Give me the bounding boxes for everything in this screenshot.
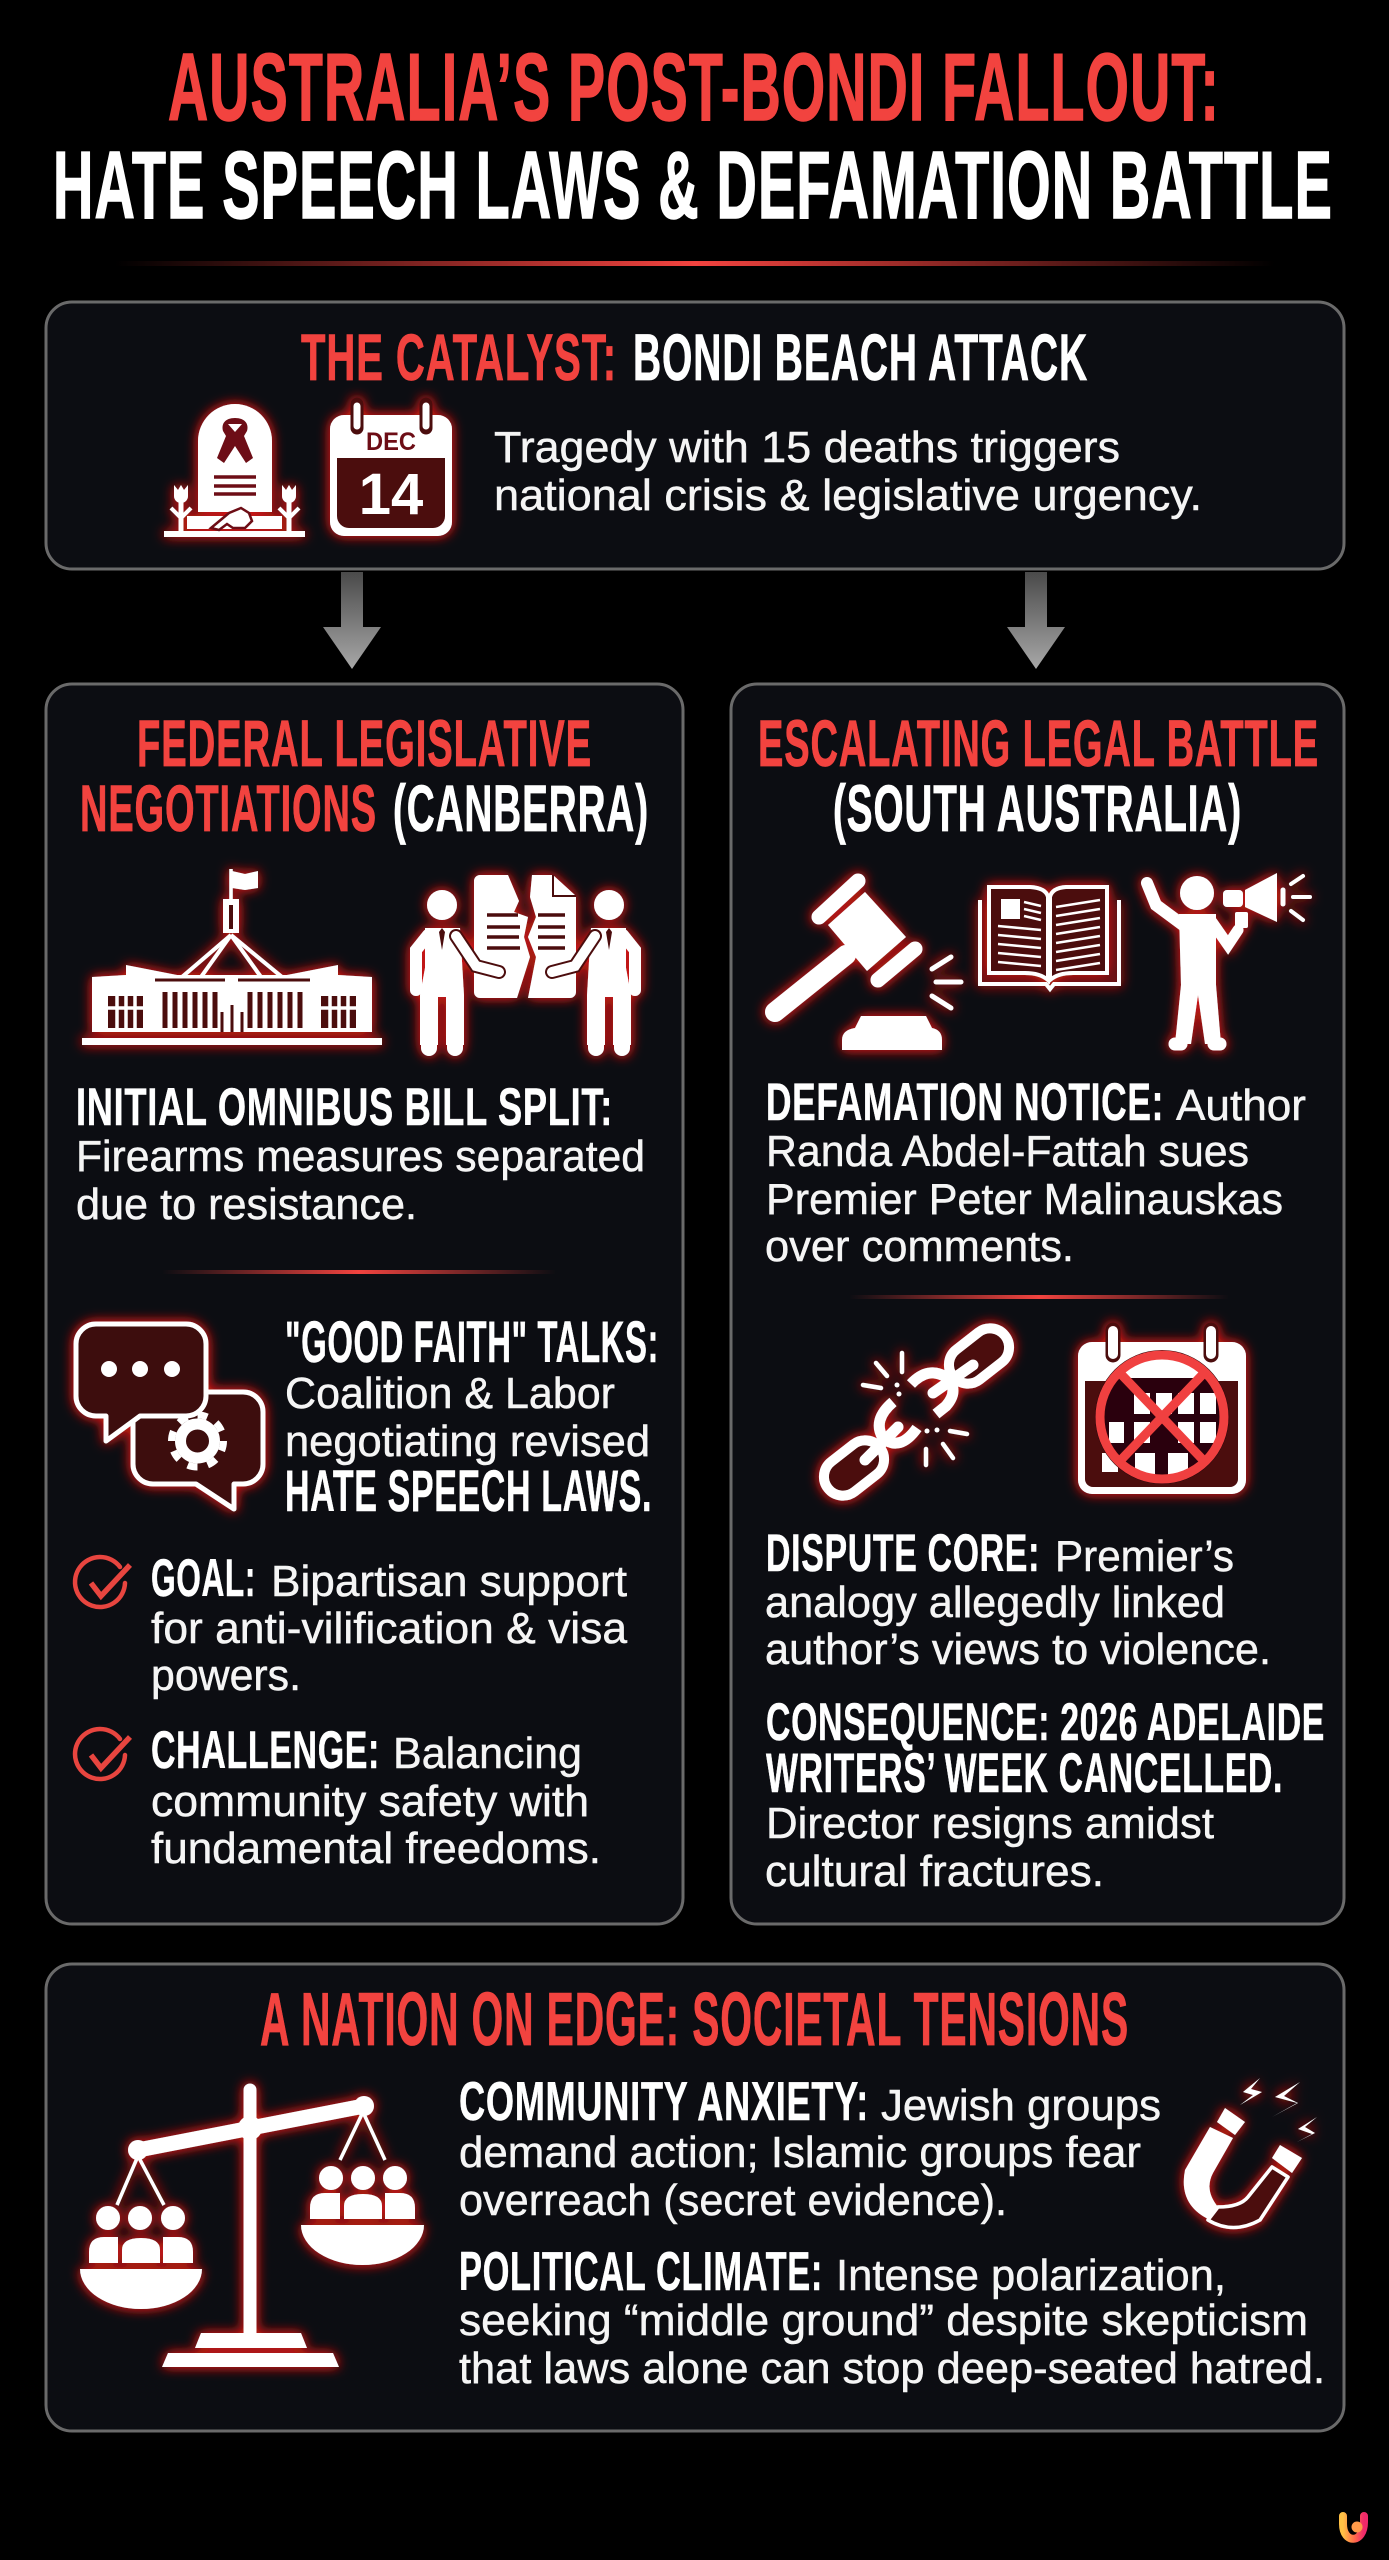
goal text: GOAL: <box>151 1549 256 1608</box>
arrow: right branch <box>1007 572 1065 669</box>
challenge text: CHALLENGE: <box>151 1721 380 1780</box>
goal text <box>151 1549 628 1700</box>
good faith talks text: HATE SPEECH LAWS. <box>285 1459 652 1524</box>
federal heading: FEDERAL LEGISLATIVE <box>137 706 592 780</box>
defamation notice text <box>765 1073 1306 1271</box>
icon: cancelled calendar <box>1078 1330 1246 1494</box>
defamation notice text: Author <box>1176 1081 1306 1130</box>
catalyst heading: BONDI BEACH ATTACK <box>633 320 1088 394</box>
community anxiety text: COMMUNITY ANXIETY: <box>459 2070 869 2132</box>
defamation notice text: Randa Abdel-Fattah sues <box>766 1127 1249 1176</box>
catalyst description: Tragedy with 15 deaths triggers <box>494 423 1120 472</box>
dispute core text: author’s views to violence. <box>765 1625 1271 1674</box>
defamation notice text: Premier Peter Malinauskas <box>766 1175 1283 1224</box>
icon: parliament house <box>82 869 382 1045</box>
initial omnibus bill split text: due to resistance. <box>76 1180 417 1229</box>
icon: balance scale with people <box>80 2090 424 2367</box>
icon: calendar dec 14: DEC <box>366 428 416 456</box>
initial omnibus bill split text: INITIAL OMNIBUS BILL SPLIT: <box>76 1078 613 1137</box>
goal text: for anti-vilification & visa <box>151 1604 628 1653</box>
good faith talks text: "GOOD FAITH" TALKS: <box>285 1310 659 1375</box>
goal text: powers. <box>151 1651 301 1700</box>
title <box>53 34 1333 239</box>
community anxiety text <box>459 2070 1161 2225</box>
dispute core text: Premier’s <box>1055 1532 1234 1581</box>
federal heading: (CANBERRA) <box>393 771 649 845</box>
icon: person with megaphone <box>1147 873 1310 1044</box>
panel: a nation on edge <box>46 1964 1344 2431</box>
icon: magnet with sparks <box>1184 2078 1317 2228</box>
federal heading <box>80 706 649 845</box>
federal heading: NEGOTIATIONS <box>80 771 377 845</box>
panel: escalating legal battle <box>731 684 1344 1924</box>
political climate text: seeking “middle ground” despite skepticism <box>459 2296 1308 2345</box>
icon: calendar dec 14 <box>330 404 452 536</box>
goal text: Bipartisan support <box>271 1557 627 1606</box>
dispute core text: DISPUTE CORE: <box>766 1524 1040 1583</box>
icon: calendar dec 14: 14 <box>359 462 423 527</box>
consequence text <box>765 1693 1325 1896</box>
political climate text <box>459 2240 1325 2393</box>
legal battle heading <box>758 706 1319 845</box>
challenge text <box>151 1721 601 1873</box>
political climate text: Intense polarization, <box>836 2251 1226 2300</box>
political climate text: POLITICAL CLIMATE: <box>459 2240 823 2302</box>
catalyst description <box>494 423 1202 520</box>
icon: logo mark <box>1343 2516 1364 2539</box>
good faith talks text: Coalition & Labor <box>285 1369 615 1418</box>
icon: chat bubbles with gear <box>76 1324 263 1509</box>
icon: gavel <box>775 881 961 1050</box>
good faith talks text <box>285 1310 659 1524</box>
consequence text: Director resigns amidst <box>766 1799 1214 1848</box>
defamation notice text: over comments. <box>765 1222 1074 1271</box>
dispute core text: analogy allegedly linked <box>765 1578 1225 1627</box>
defamation notice text: DEFAMATION NOTICE: <box>766 1073 1164 1132</box>
catalyst heading <box>301 320 1088 394</box>
panel: the catalyst <box>46 302 1344 569</box>
consequence text: cultural fractures. <box>765 1847 1104 1896</box>
catalyst heading: THE CATALYST: <box>301 320 617 394</box>
initial omnibus bill split text <box>76 1078 645 1229</box>
challenge text: fundamental freedoms. <box>151 1824 601 1873</box>
icon: two men splitting a bill <box>416 875 635 1048</box>
challenge text: community safety with <box>151 1777 589 1826</box>
dispute core text <box>765 1524 1271 1674</box>
icon: broken chain <box>816 1321 1017 1503</box>
icon: check goal <box>75 1557 130 1607</box>
community anxiety text: Jewish groups <box>881 2081 1161 2130</box>
icon: open book <box>980 887 1119 989</box>
challenge text: Balancing <box>393 1729 582 1778</box>
community anxiety text: overreach (secret evidence). <box>459 2176 1007 2225</box>
panel: federal legislative negotiations <box>46 684 683 1924</box>
arrow: left branch <box>323 572 381 669</box>
catalyst description: national crisis & legislative urgency. <box>494 471 1202 520</box>
icon: gravestone with ribbon <box>164 404 305 537</box>
icon: check challenge <box>75 1729 130 1779</box>
initial omnibus bill split text: Firearms measures separated <box>76 1132 645 1181</box>
community anxiety text: demand action; Islamic groups fear <box>459 2128 1141 2177</box>
good faith talks text: negotiating revised <box>285 1417 650 1466</box>
political climate text: that laws alone can stop deep-seated hatred. <box>459 2344 1325 2393</box>
